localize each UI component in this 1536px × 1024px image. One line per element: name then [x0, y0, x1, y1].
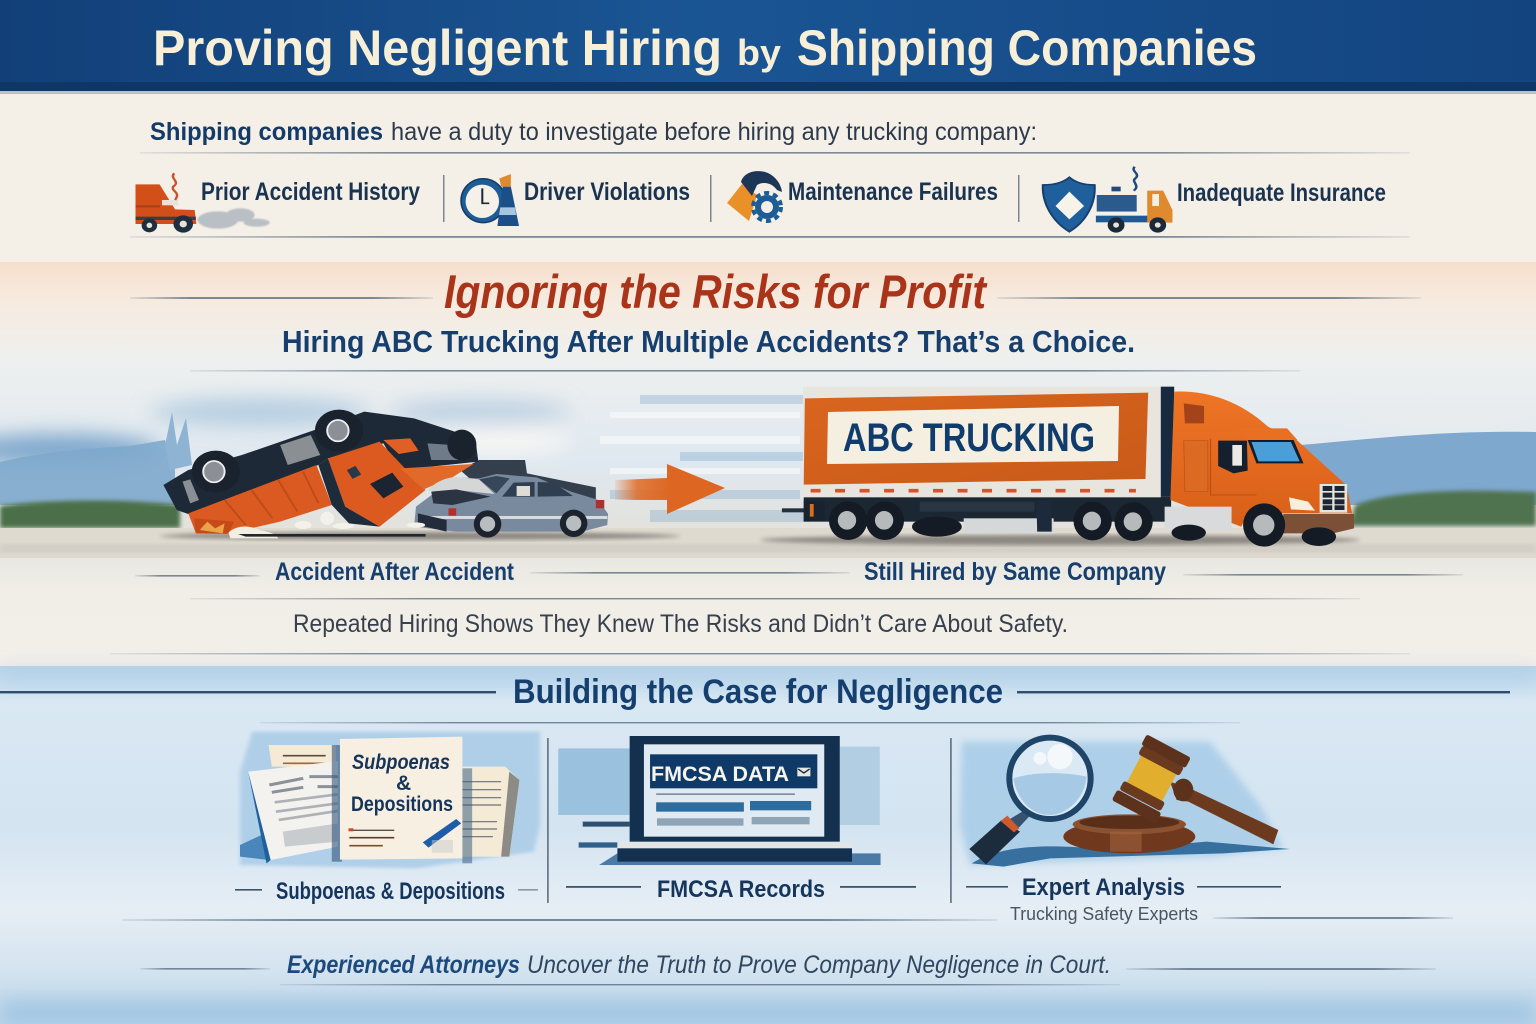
- title: Shipping Companies: [797, 20, 1257, 76]
- header banner: [0, 0, 1536, 94]
- sign: ABC Trucking: ABC TRUCKING: [843, 416, 1095, 460]
- icon: computer showing FMCSA data: [558, 736, 881, 865]
- statement: repeated hiring: Repeated Hiring Shows They Knew The Risks and Didn’t Care About Safety.: [293, 610, 1068, 638]
- panel: shipping company duty: [0, 94, 1536, 264]
- text: subpoenas and depositions on page: &: [396, 772, 411, 795]
- closing statement: Uncover the Truth to Prove Company Negligence in Court.: [527, 951, 1111, 979]
- label: inadequate insurance: Inadequate Insurance: [1177, 179, 1386, 207]
- intro sentence: Shipping companies: [150, 118, 383, 146]
- icon: smoking truck: [136, 173, 270, 233]
- caption: still hired by same company: Still Hired by Same Company: [864, 558, 1166, 586]
- caption: FMCSA records: FMCSA Records: [657, 876, 825, 903]
- title: Proving Negligent Hiring: [153, 20, 722, 76]
- illustration: overturned truck and crashed car: [163, 410, 608, 538]
- text: subpoenas and depositions on page: Subpoenas: [352, 751, 450, 774]
- title: by: [737, 32, 781, 73]
- intro sentence: have a duty to investigate before hiring any trucking company:: [391, 118, 1037, 146]
- label: prior accident history: Prior Accident History: [201, 178, 420, 206]
- caption: expert analysis: Expert Analysis: [1022, 874, 1185, 901]
- panel: building the case: [0, 666, 1536, 1024]
- illustration: ABC Trucking semi truck: [782, 387, 1354, 547]
- panel: ignoring the risks: [0, 262, 1536, 666]
- text: FMCSA data: FMCSA DATA: [651, 763, 789, 786]
- icon: legal documents: [240, 732, 540, 868]
- text: subpoenas and depositions on page: Depositions: [351, 793, 453, 816]
- arrow: from accident to rehiring: [615, 464, 725, 514]
- heading: ignoring the risks for profit: Ignoring the Risks for Profit: [444, 265, 988, 318]
- heading: building the case for negligence: Building the Case for Negligence: [513, 673, 1003, 711]
- label: driver violations: Driver Violations: [524, 178, 690, 206]
- caption: subpoenas and depositions: Subpoenas & Depositions: [276, 878, 505, 905]
- sign: ABC Trucking: [827, 406, 1119, 464]
- icon: wrench and gear: [727, 171, 782, 221]
- caption: trucking safety experts: Trucking Safety Experts: [1010, 904, 1198, 924]
- caption: accident after accident: Accident After Accident: [275, 558, 515, 586]
- icon: shield and truck: [1043, 167, 1172, 233]
- label: maintenance failures: Maintenance Failures: [788, 178, 998, 206]
- closing statement: Experienced Attorneys: [287, 951, 520, 979]
- icon: magnifying glass and gavel: [960, 734, 1290, 867]
- sky and landscape background: [0, 395, 1536, 558]
- subheading: Hiring ABC Trucking After Multiple Accidents? That’s a Choice.: [282, 324, 1135, 359]
- icon: clock and cone: [461, 174, 519, 226]
